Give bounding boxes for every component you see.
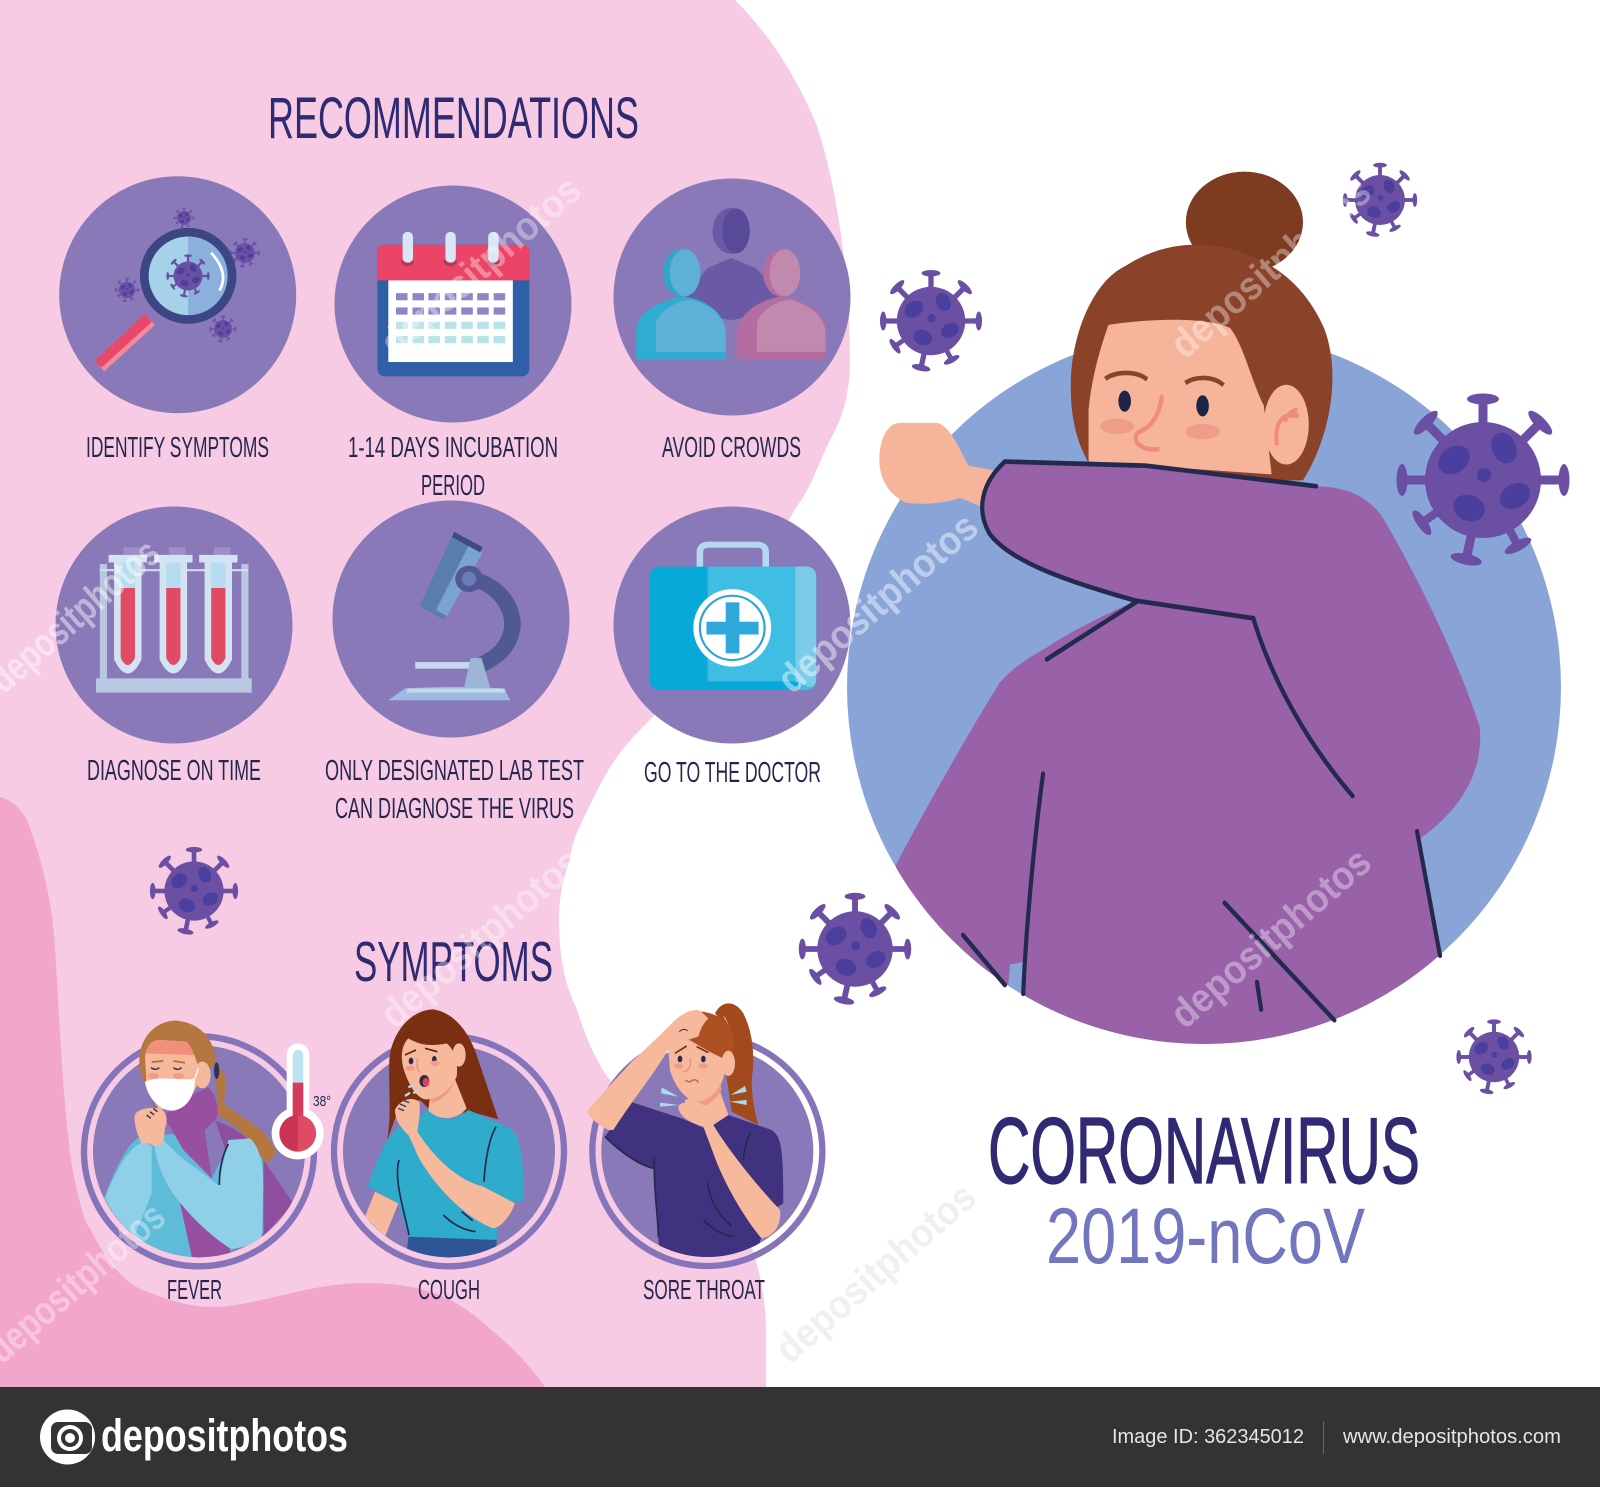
icon: virus lower left of figure <box>799 893 911 1006</box>
label: identify symptoms: IDENTIFY SYMPTOMS <box>86 432 269 464</box>
watermarks: depositphotos <box>1162 840 1380 1037</box>
icon: virus top right <box>1343 163 1417 238</box>
icon: virus bottom right <box>1456 1019 1532 1095</box>
symptom: sore throat <box>587 1003 822 1266</box>
watermarks: depositphotos <box>372 168 590 365</box>
background: pink wave panel <box>0 0 850 1387</box>
heading: recommendations: RECOMMENDATIONS <box>268 86 639 151</box>
footer logo wordmark: depositphotos <box>101 1410 348 1461</box>
footer bar <box>0 1387 1600 1487</box>
icon: thermometer <box>272 1043 324 1159</box>
label: lab test line 1: ONLY DESIGNATED LAB TEST <box>325 755 584 787</box>
label: 38 degrees: 38° <box>313 1093 331 1110</box>
watermarks: depositphotos <box>769 505 987 702</box>
label: avoid crowds: AVOID CROWDS <box>662 432 801 464</box>
icon: crowd of people <box>614 178 850 416</box>
icon: virus left of symptoms <box>150 847 238 936</box>
icon: calendar <box>334 186 572 422</box>
icon: virus large right <box>1396 394 1570 568</box>
recommendations icons <box>56 176 850 744</box>
watermarks: depositphotos <box>767 1175 985 1372</box>
icon: first aid kit <box>614 506 850 744</box>
label: incubation line 1: 1-14 DAYS INCUBATION <box>348 432 558 464</box>
watermarks: depositphotos <box>372 840 590 1037</box>
label: lab test line 2: CAN DIAGNOSE THE VIRUS <box>335 793 574 825</box>
symptom: cough <box>334 1009 564 1266</box>
symptom: fever <box>84 1021 324 1266</box>
icon: microscope <box>332 500 570 738</box>
symptom labels <box>167 1274 765 1305</box>
label: incubation line 2: PERIOD <box>421 470 485 502</box>
footer logo icon <box>40 1410 95 1464</box>
recommendation labels <box>86 432 821 825</box>
footer image id: Image ID: 362345012 <box>1112 1426 1304 1448</box>
watermarks: depositphotos <box>1162 170 1380 367</box>
label: sore throat: SORE THROAT <box>643 1274 765 1305</box>
label: diagnose on time: DIAGNOSE ON TIME <box>87 755 261 787</box>
label: cough: COUGH <box>418 1274 480 1305</box>
label: fever: FEVER <box>167 1274 222 1305</box>
main figure: woman coughing into her elbow <box>879 172 1480 1108</box>
footer website: www.depositphotos.com <box>1342 1426 1561 1448</box>
subtitle: 2019-nCoV: 2019-nCoV <box>1046 1191 1365 1280</box>
icon: virus upper left of figure <box>880 270 982 373</box>
icon: identify symptoms <box>59 176 296 413</box>
background: darker pink blob <box>0 797 545 1387</box>
blue circle behind main figure <box>847 330 1561 1044</box>
label: go to the doctor: GO TO THE DOCTOR <box>644 757 821 789</box>
watermarks <box>0 168 1380 1372</box>
icon: test tubes <box>56 506 292 744</box>
heading: symptoms: SYMPTOMS <box>354 930 553 994</box>
